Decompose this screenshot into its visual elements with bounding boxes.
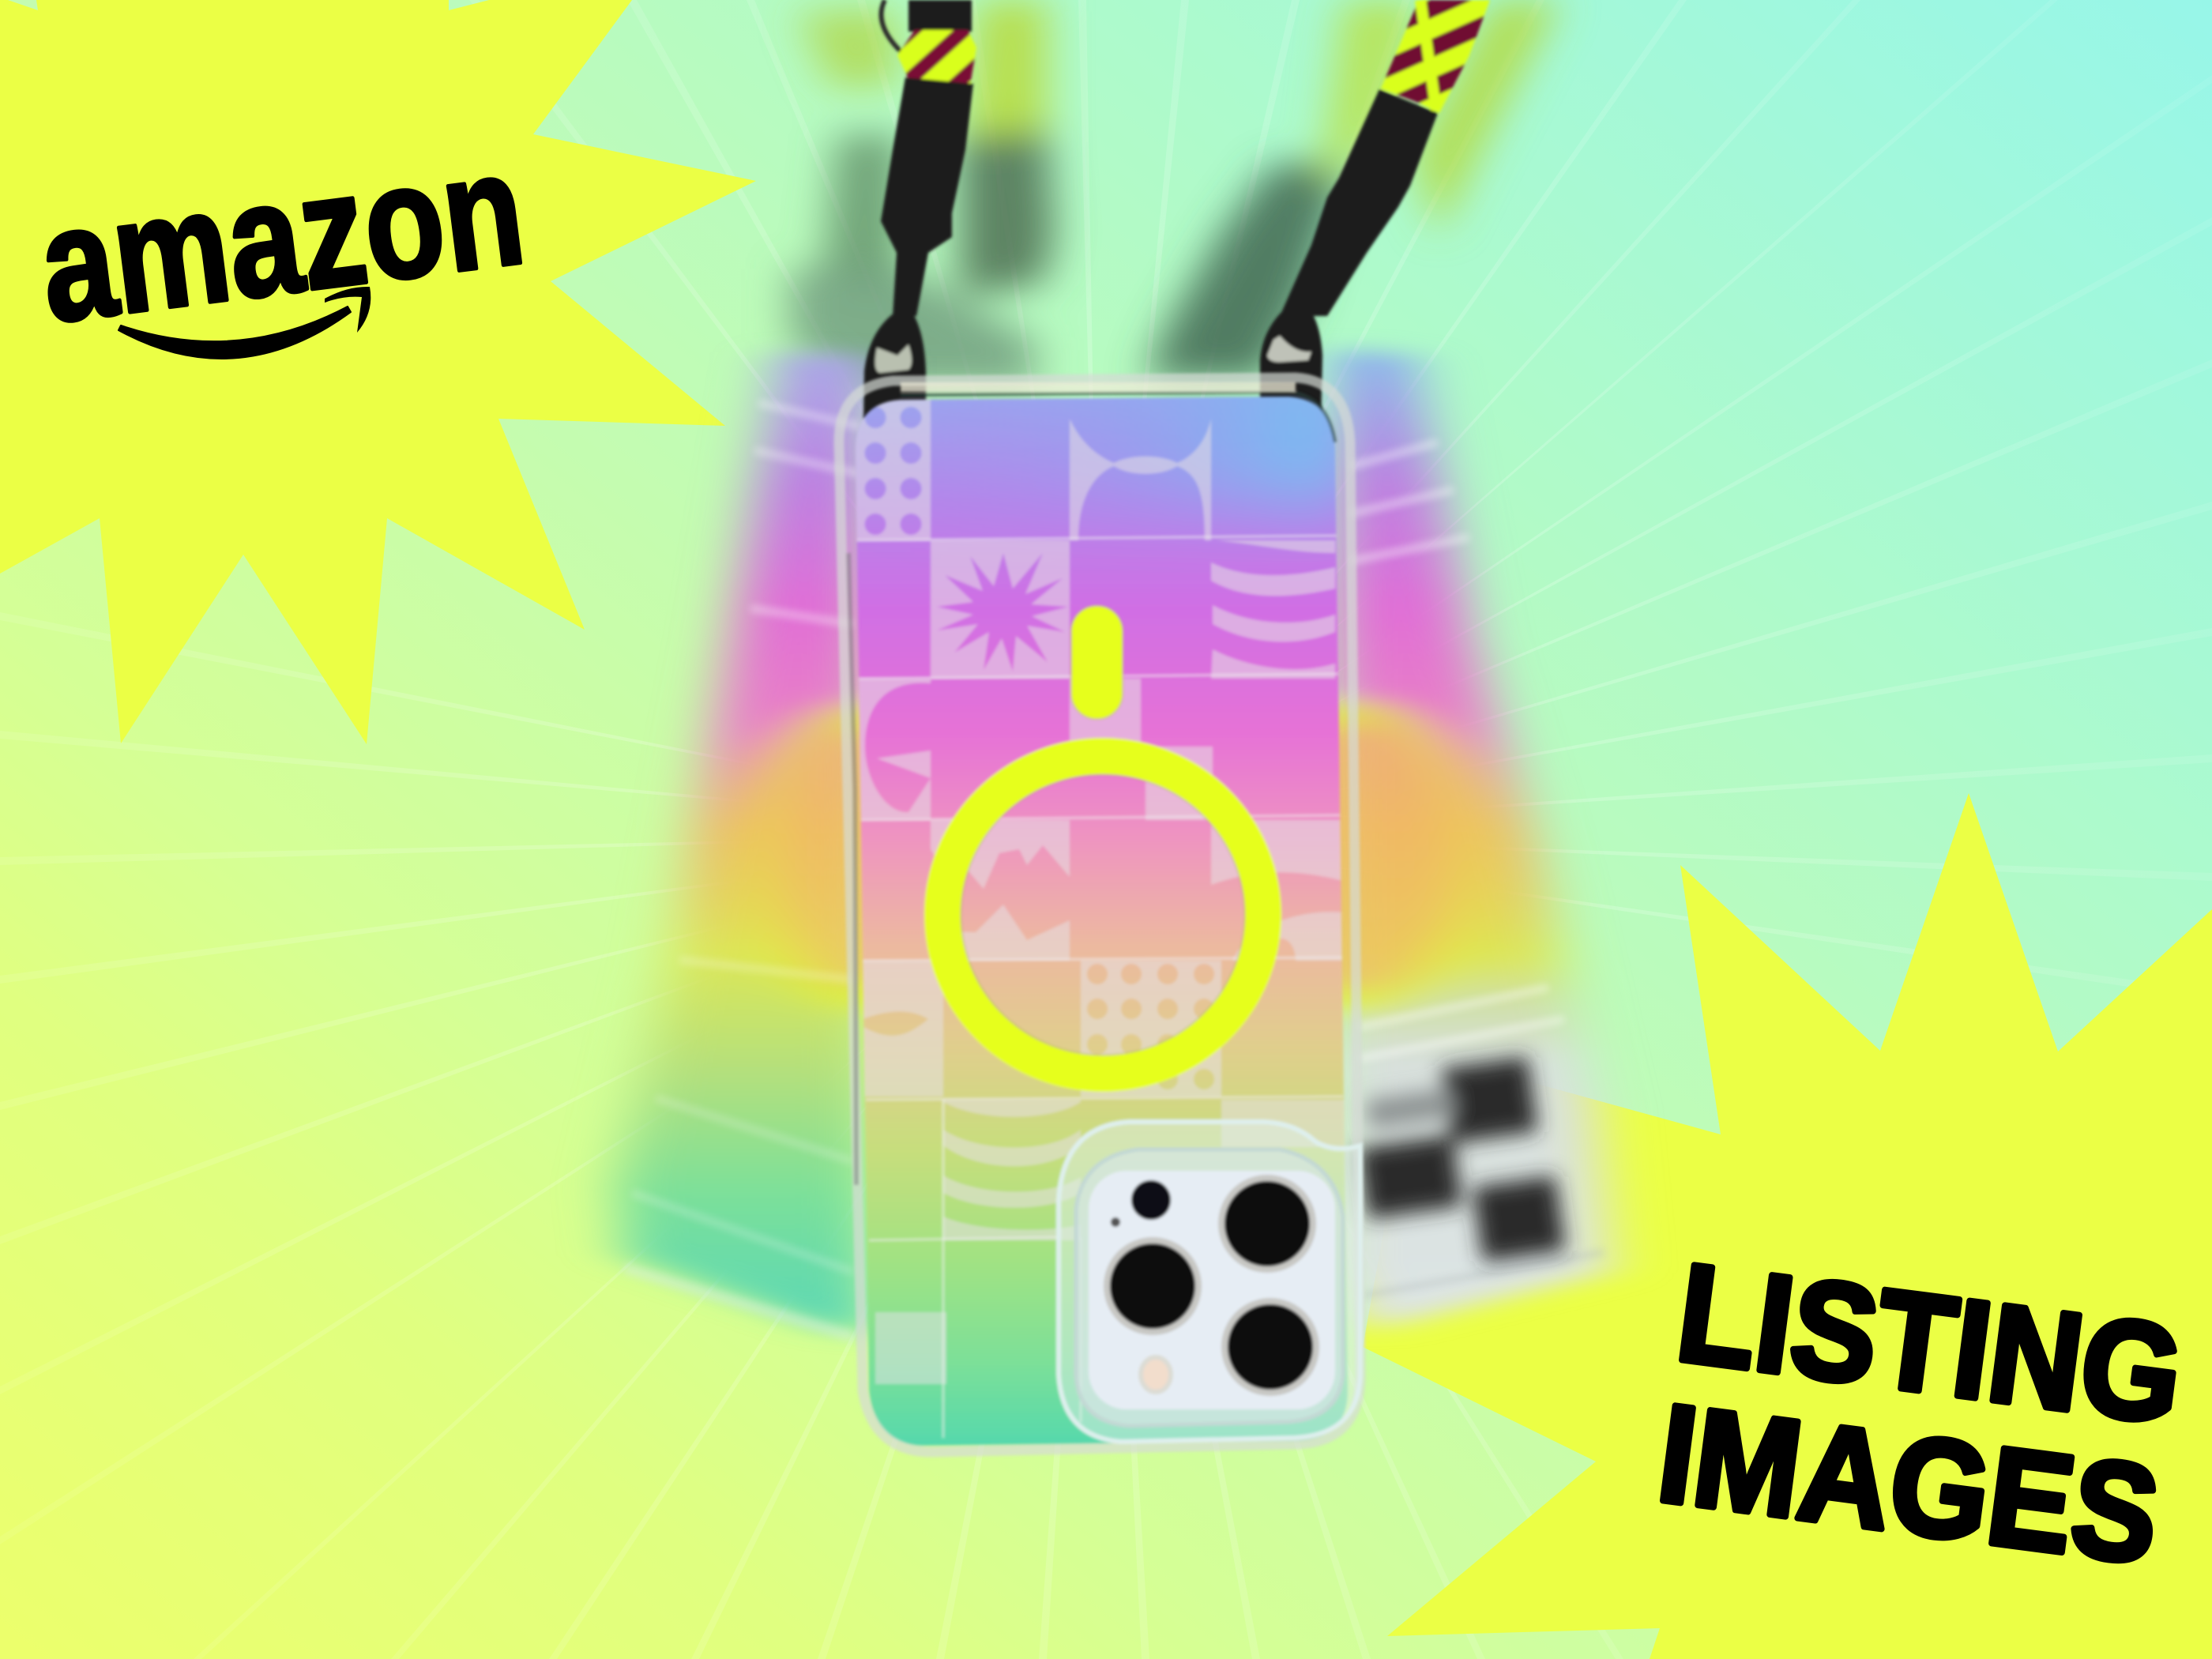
- motion-blurred ghost shadows behind straps: [790, 0, 1560, 387]
- clear case outline: [839, 378, 1360, 1452]
- camera lenses: [1104, 1175, 1319, 1396]
- phone case: [839, 371, 1360, 1452]
- lanyard strap: right: [1260, 0, 1490, 427]
- title line 2: IMAGES: [1650, 1375, 2167, 1593]
- title: listing images: [1650, 1235, 2191, 1593]
- starburst: top left: [0, 0, 756, 744]
- ghost texture: right stripes and blurred camera blocks: [1351, 442, 1604, 1296]
- logo: amazon wordmark: amazon: [31, 118, 533, 357]
- logo: amazon smile arrow: [118, 287, 371, 359]
- case body gradient: [856, 397, 1348, 1446]
- camera bump: [1059, 1122, 1360, 1442]
- magsafe pill: [1071, 606, 1123, 719]
- lanyard strap: left: [863, 0, 976, 419]
- case pattern tiles: [856, 371, 1348, 1438]
- blurred ghost of phone: right: [1232, 348, 1612, 1331]
- ghost texture: left stripes: [624, 403, 861, 1337]
- magsafe ring: [942, 756, 1263, 1074]
- starburst: bottom right: [1363, 793, 2212, 1659]
- blurred ghost of phone: left: [616, 352, 968, 1337]
